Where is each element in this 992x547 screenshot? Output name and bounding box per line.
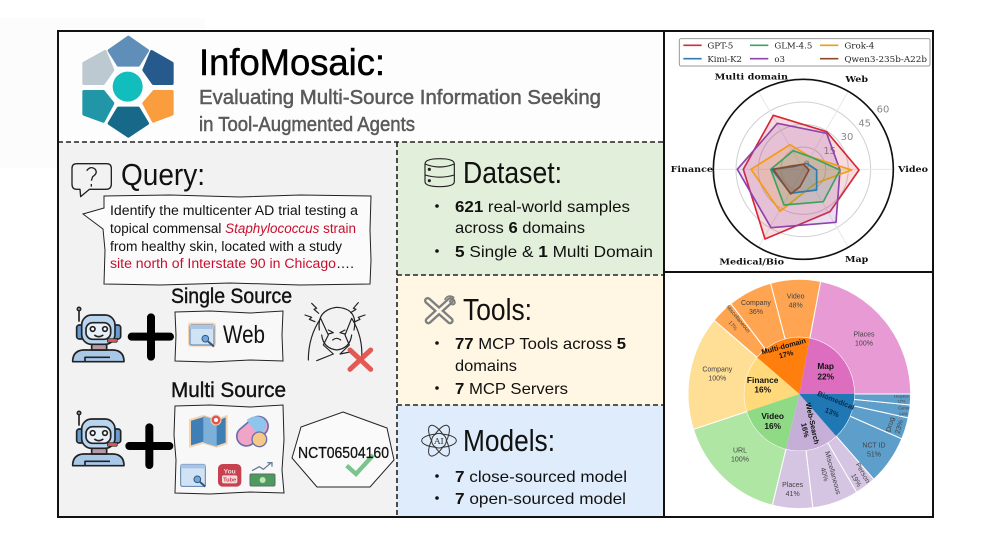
- models bullets: 7 close-sourced model: [455, 469, 627, 486]
- dataset bullets: 621 real-world samples: [455, 199, 630, 216]
- radar legend: o3: [774, 54, 785, 64]
- logo mosaic: [84, 37, 172, 136]
- multi source box: [174, 405, 284, 494]
- dataset bullets: [435, 199, 653, 261]
- sunburst outer labels: Company: [702, 367, 733, 374]
- sunburst outer labels: Hospital: [894, 394, 909, 399]
- sunburst inner labels: 17%: [778, 348, 795, 360]
- radar tick labels: 30: [841, 132, 853, 143]
- radar axis labels: Video: [897, 165, 928, 175]
- answer badge: [292, 412, 394, 487]
- icon: youtube: Tube: [223, 477, 236, 483]
- icon: AI atom: [422, 422, 456, 459]
- multi source heading: Multi Source: [171, 379, 286, 402]
- radar chart: [671, 39, 930, 267]
- sunburst inner labels: Web-Search: [804, 402, 821, 446]
- sunburst outer labels: 51%: [867, 451, 881, 458]
- icon: AI atom: AI: [433, 437, 444, 447]
- tools bullets: 77 MCP Tools across 5: [455, 336, 626, 353]
- icon: pill: [233, 413, 272, 450]
- icon: youtube: [218, 464, 241, 487]
- single source heading: Single Source: [171, 285, 292, 308]
- radar legend: GPT-5: [707, 41, 733, 51]
- sunburst outer labels: 14%: [899, 412, 908, 417]
- query speech box: site north of Interstate 90 in Chicago ….: [110, 256, 354, 271]
- sunburst inner labels: Multi-domain: [761, 336, 807, 356]
- radar axis labels: Web: [844, 75, 868, 85]
- sunburst outer labels: Miscellaneous: [725, 304, 751, 334]
- query speech box: from healthy skin, located with a study: [110, 239, 342, 254]
- subtitle: [199, 87, 601, 136]
- sunburst outer labels: 19%: [849, 473, 862, 488]
- radar tick labels: 45: [858, 119, 871, 130]
- icon: green check: [347, 455, 373, 474]
- query speech box: topical commensal Staphylococcus strain: [110, 221, 356, 236]
- radar tick labels: 15: [823, 146, 836, 157]
- sunburst sectors: [688, 279, 911, 509]
- tools bullets: 7 MCP Servers: [455, 381, 568, 398]
- sunburst outer labels: 40%: [819, 467, 829, 482]
- dataset heading: Dataset:: [463, 155, 562, 190]
- radar legend: Grok-4: [844, 41, 874, 51]
- panel: models: [397, 405, 664, 517]
- tools bullets: [435, 336, 626, 398]
- title: InfoMosaic:: [199, 42, 385, 83]
- icon: tools: [428, 296, 455, 321]
- sunburst outer labels: 23%: [895, 419, 905, 435]
- radar axis labels: Finance: [671, 165, 714, 175]
- radar tick labels: 0: [803, 159, 810, 170]
- sunburst outer labels: 100%: [708, 376, 726, 383]
- sunburst outer labels: Places: [854, 332, 875, 339]
- radar axis labels: Map: [845, 255, 868, 265]
- models heading: Models:: [463, 423, 555, 458]
- tools bullets: domains: [455, 358, 517, 375]
- icon: red cross: [350, 350, 371, 369]
- icon: plus multi: [129, 427, 169, 465]
- sunburst inner labels: 13%: [823, 405, 841, 419]
- sunburst outer labels: Company: [741, 300, 771, 307]
- icon: web window: [188, 323, 216, 347]
- sunburst outer labels: Drug: [886, 416, 896, 433]
- icon: robot multi: [73, 411, 124, 466]
- sunburst outer labels: Gene: [898, 405, 910, 410]
- icon: database: [425, 159, 454, 187]
- sunburst inner labels: 16%: [754, 385, 772, 395]
- subtitle: Evaluating Multi-Source Information Seeking: [199, 87, 601, 109]
- sunburst outer labels: 12%: [897, 399, 906, 404]
- radar axis labels: Medical/Bio: [719, 257, 784, 267]
- sunburst outer labels: URL: [733, 447, 747, 454]
- sunburst outer labels: Miscellaneous: [823, 451, 841, 496]
- sunburst outer labels: 36%: [749, 309, 763, 316]
- sunburst inner labels: Map: [817, 361, 834, 371]
- radar axis labels: [671, 72, 928, 267]
- answer text: NCT06504160: [298, 445, 389, 462]
- sunburst outer labels: 100%: [855, 341, 873, 348]
- sunburst inner labels: Finance: [747, 375, 779, 385]
- web source box: [175, 311, 283, 362]
- sunburst outer labels: NCT ID: [862, 442, 886, 449]
- icon: map: [190, 415, 227, 447]
- sunburst inner labels: [747, 336, 856, 446]
- sunburst outer labels: Video: [787, 294, 805, 301]
- query speech box: [83, 195, 371, 285]
- dataset bullets: across 6 domains: [455, 220, 585, 237]
- web label: Web: [223, 321, 265, 349]
- tools heading: Tools:: [463, 292, 532, 327]
- icon group: sources: [181, 413, 275, 487]
- sunburst inner labels: 22%: [817, 372, 835, 382]
- query heading: Query:: [121, 157, 205, 192]
- models bullets: [435, 469, 627, 508]
- sunburst outer labels: Places: [782, 482, 804, 489]
- radar axis labels: Multi domain: [715, 72, 789, 82]
- icon: youtube: You: [224, 468, 236, 475]
- radar tick labels: 60: [877, 105, 889, 116]
- icon: plus single: [132, 317, 170, 357]
- icon: question bubble: [72, 164, 111, 197]
- radar legend: Kimi-K2: [707, 54, 742, 64]
- dataset bullets: 5 Single & 1 Multi Domain: [455, 244, 653, 261]
- sunburst outer labels: 41%: [786, 491, 800, 498]
- subtitle: in Tool-Augmented Agents: [199, 114, 415, 136]
- sunburst inner labels: Video: [761, 411, 784, 421]
- sunburst outer labels: Person: [854, 462, 871, 485]
- sunburst outer labels: 17%: [727, 320, 738, 332]
- sunburst inner labels: 16%: [764, 421, 782, 431]
- radar legend: Qwen3-235b-A22b: [844, 54, 927, 64]
- sunburst chart: [688, 279, 911, 509]
- radar legend: GLM-4.5: [774, 41, 812, 51]
- panel: tools: [397, 275, 664, 405]
- sunburst outer labels: 100%: [731, 456, 749, 463]
- icon: robot single: [73, 307, 124, 362]
- sunburst outer labels: 48%: [789, 303, 803, 310]
- panel: query: [58, 142, 397, 517]
- radar legend: [679, 39, 930, 66]
- panel: header: [58, 31, 664, 142]
- icon: stressed person: [305, 303, 365, 361]
- panel: dataset: [397, 142, 664, 275]
- sunburst inner labels: 16%: [799, 422, 811, 439]
- query speech box: Identify the multicenter AD trial testing a: [110, 203, 359, 218]
- sunburst inner labels: Biomedical: [816, 389, 856, 412]
- icon: finance: [250, 463, 275, 486]
- models bullets: 7 open-sourced model: [455, 491, 626, 508]
- radar tick labels: [803, 105, 889, 170]
- radar series: [737, 115, 859, 239]
- icon: web window small: [181, 464, 205, 487]
- sunburst outer labels: [702, 294, 910, 498]
